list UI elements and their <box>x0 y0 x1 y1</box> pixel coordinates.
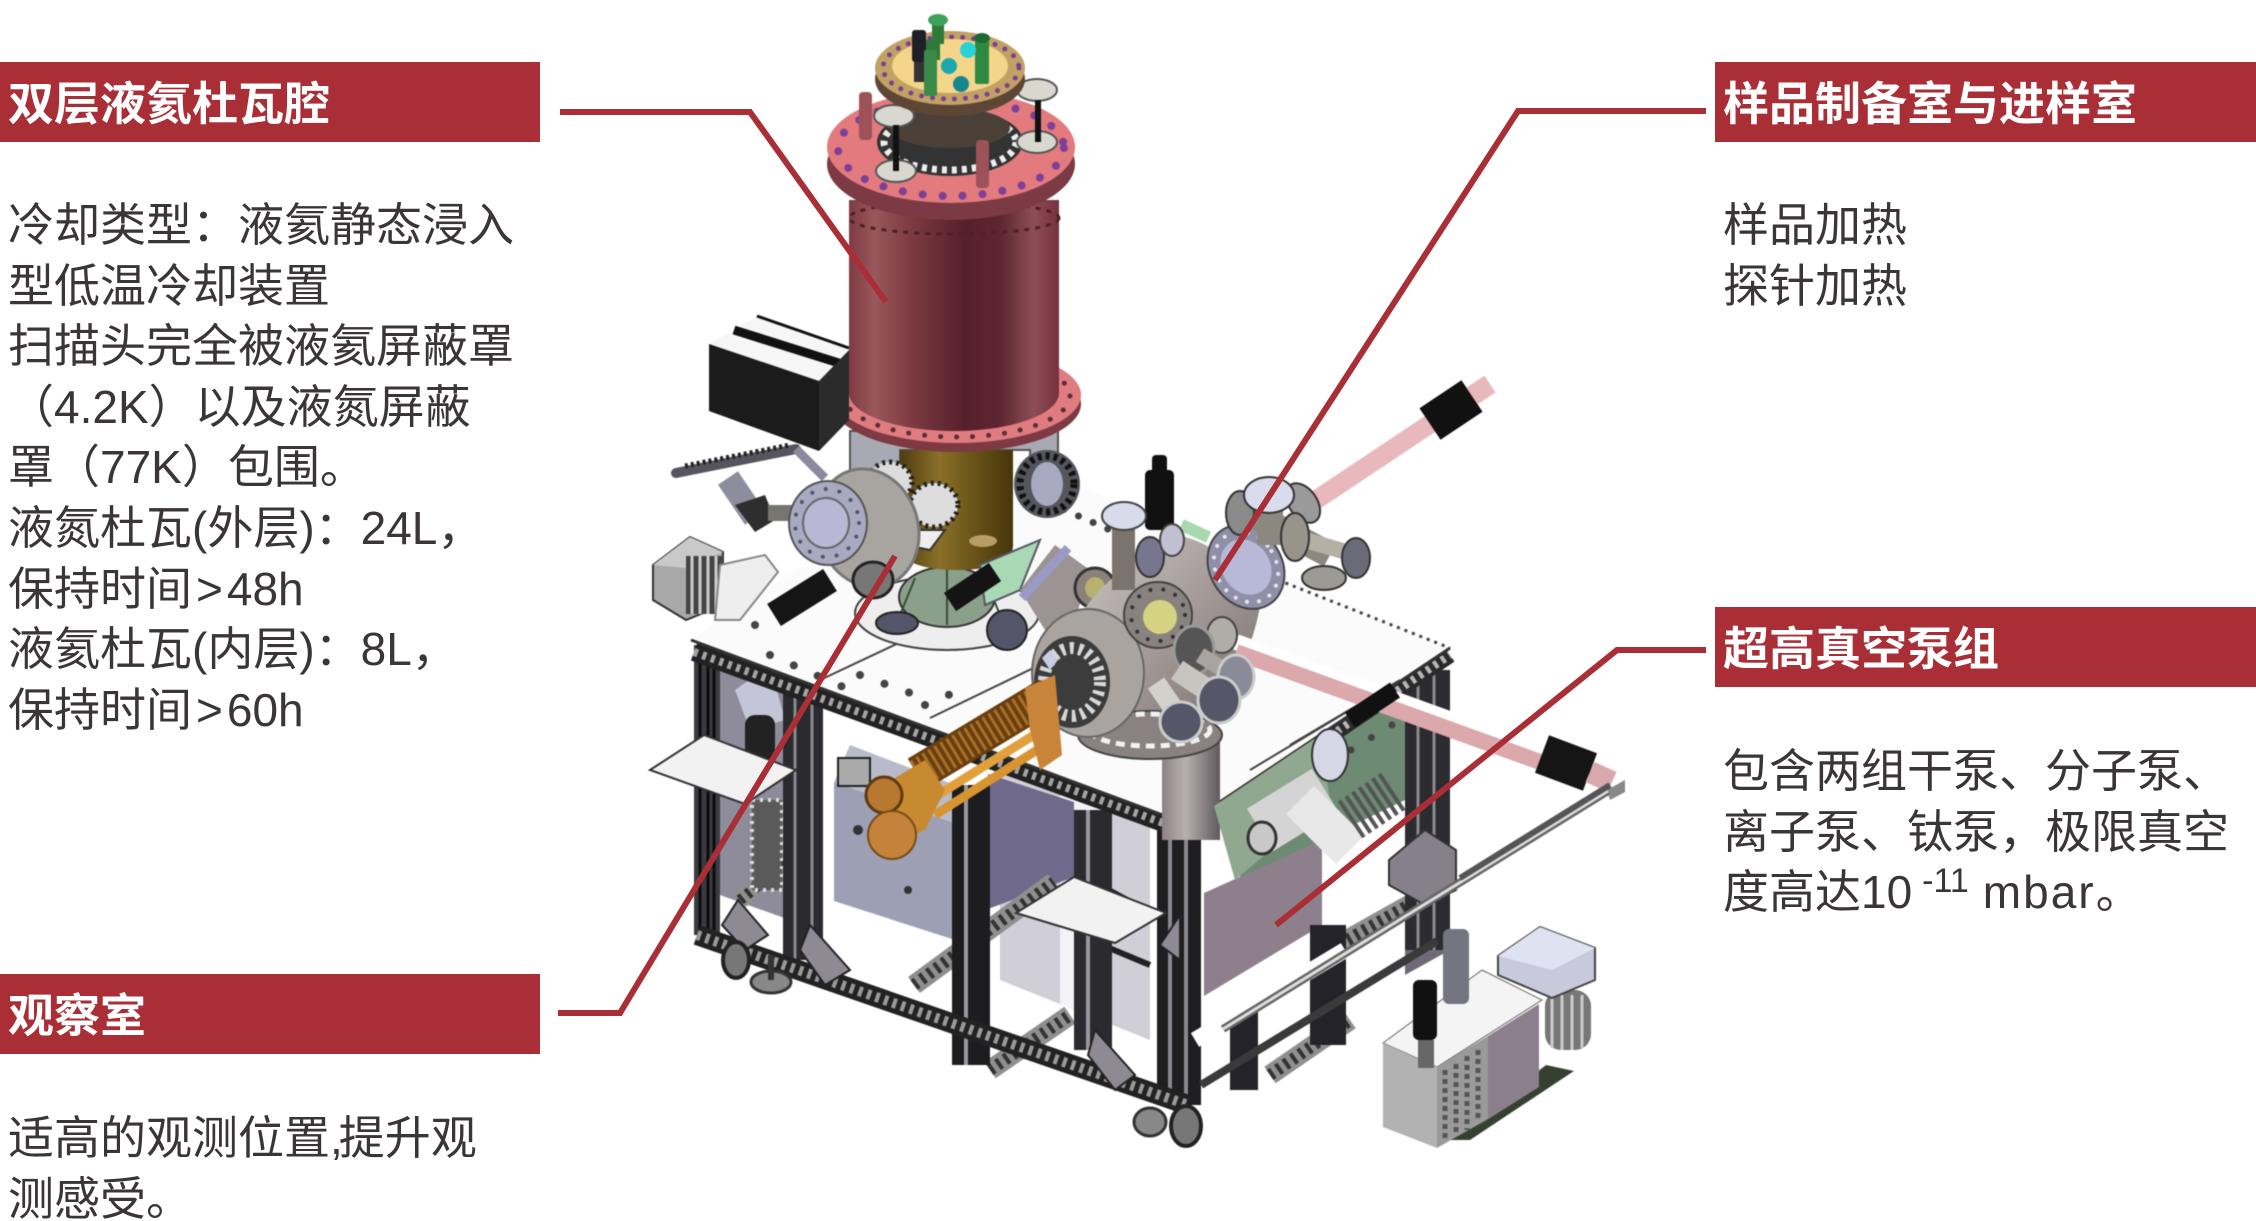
speckled radiation shields <box>868 462 958 527</box>
frame beams <box>694 652 1450 1105</box>
black electronics box <box>709 316 849 451</box>
sphere mesh flange <box>1032 609 1144 737</box>
rotary dry pump <box>1383 927 1595 1148</box>
cryostat outer cylinder <box>849 200 1059 431</box>
heading: vacuum pumps: 超高真空泵组 <box>1723 623 1999 675</box>
lower ports <box>1156 655 1254 742</box>
thermal stage assembly <box>859 79 1057 188</box>
heading: dewar: 双层液氦杜瓦腔 <box>8 78 330 130</box>
white bracket <box>905 530 945 550</box>
base blank flanges <box>876 610 1027 650</box>
text block: dewar details: 冷却类型：液氦静态浸入 型低温冷却装置 扫描头完全被液氦屏蔽罩 （4.2K）以及液氮屏蔽 罩（77K）包围。 液氮杜瓦(外层)：24L， 保持时间>48h 液氦杜瓦(内层)：8L， 保持时间>60h <box>8 199 514 736</box>
preparation chamber left arm <box>1020 545 1115 630</box>
purple back panel <box>988 774 1074 909</box>
viewport flange <box>789 481 867 565</box>
cryostat upper flange <box>827 91 1075 220</box>
table top <box>691 445 1450 824</box>
frame posts <box>694 645 1450 1105</box>
heading: dewar <box>0 62 540 142</box>
frame back and interior panels <box>720 660 1450 1075</box>
handle and feedthrough <box>676 445 825 532</box>
vacuum column under sphere <box>1162 735 1220 840</box>
small side port <box>853 562 893 598</box>
black cylinder with green bracket <box>950 540 1040 605</box>
gray adapter <box>850 431 1058 474</box>
top lid <box>875 31 1025 116</box>
upper sphere chamber <box>1060 537 1261 759</box>
six way cross <box>1226 477 1370 590</box>
caster feet <box>723 942 1201 1146</box>
golden bellows <box>866 675 1062 859</box>
heading: preparation chamber <box>1715 62 2256 142</box>
upper pink transfer rod <box>1316 384 1490 500</box>
feedthrough instruments <box>912 14 990 96</box>
black valve <box>774 580 830 615</box>
electronics cabinet <box>834 745 968 939</box>
shelves <box>650 735 1166 943</box>
mauve pump side panel <box>1204 840 1322 996</box>
long rod <box>1223 785 1610 1029</box>
right porthole <box>1014 450 1080 518</box>
top cross and gauge <box>1102 455 1211 590</box>
text block: vacuum pump details: 包含两组干泵、分子泵、 离子泵、钛泵，极限真空 度高达10 -11 mbar。 <box>1723 745 2229 918</box>
text block: preparation chamber details: 样品加热 探针加热 <box>1723 199 1907 312</box>
green panel and turbo pump <box>1214 690 1456 905</box>
heading: vacuum pumps <box>1715 607 2256 687</box>
left motor <box>653 537 778 620</box>
grating <box>752 800 782 890</box>
gussets <box>722 900 1180 1090</box>
heading: observation chamber: 观察室 <box>8 990 146 1042</box>
cryostat lower flange <box>833 347 1081 452</box>
side port arm with viewport <box>1192 511 1300 623</box>
lower pink transfer rod <box>1174 617 1625 800</box>
heading: preparation chamber: 样品制备室与进样室 <box>1723 78 2137 130</box>
rear lower rails <box>740 860 1420 1075</box>
brass inner chamber <box>900 450 1013 570</box>
heading: observation chamber <box>0 974 540 1054</box>
big gray flange plate <box>802 455 934 601</box>
base ring and green cone <box>855 567 1039 650</box>
yellow viewport <box>1124 582 1192 648</box>
